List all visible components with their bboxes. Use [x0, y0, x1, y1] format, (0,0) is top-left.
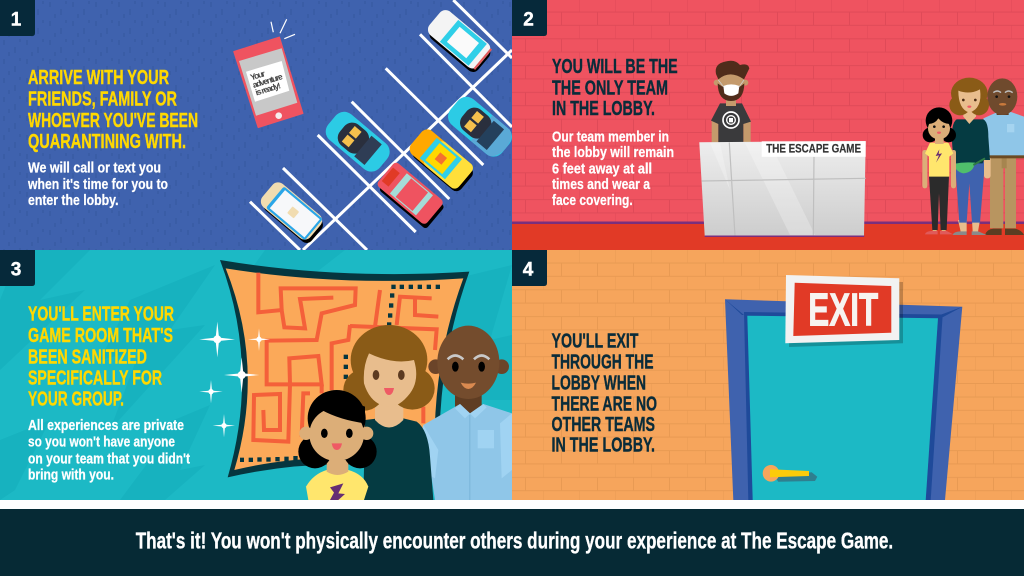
- icon: phone with message: is ready!: [254, 80, 282, 97]
- family standing in lobby: [922, 78, 1024, 235]
- heading: panel 3: BEEN SANITIZED: [28, 345, 147, 368]
- heading: panel 4: OTHER TEAMS: [552, 413, 655, 436]
- panel 1: arrive: [0, 0, 517, 250]
- badge: number 2: [512, 0, 547, 36]
- text: panel 3 body: bring with you.: [28, 466, 114, 483]
- text: panel 1 body: enter the lobby.: [28, 192, 118, 209]
- badge: number 1: 1: [11, 10, 22, 30]
- person: man: [414, 326, 512, 500]
- heading: panel 3: YOUR GROUP.: [28, 388, 124, 411]
- heading: panel 1: WHOEVER YOU'VE BEEN: [28, 109, 198, 132]
- heading: panel 3: GAME ROOM THAT'S: [28, 324, 173, 347]
- text: panel 2 body: the lobby will remain: [552, 144, 674, 161]
- heading: panel 1: ARRIVE WITH YOUR: [28, 66, 169, 89]
- heading: panel 4: THERE ARE NO: [552, 392, 657, 415]
- heading: panel 4: THROUGH THE: [552, 350, 654, 373]
- icon: phone with message: Your: [249, 68, 267, 82]
- text: panel 2 body: times and wear a: [552, 176, 651, 193]
- heading: panel 2: YOU WILL BE THE: [552, 55, 678, 78]
- badge: number 3: [0, 250, 35, 286]
- icon: sparkles: [199, 322, 270, 437]
- heading: panel 4: IN THE LOBBY.: [552, 433, 655, 456]
- footer banner: [0, 500, 1024, 576]
- family portrait: [298, 325, 512, 500]
- badge: number 2: 2: [523, 10, 534, 30]
- car: white van: [260, 182, 323, 243]
- text: panel 1 body: when it's time for you to: [27, 176, 168, 193]
- car: blue convertible left: [326, 112, 390, 172]
- staff member with mask: [711, 61, 751, 143]
- heading: panel 3: SPECIFICALLY FOR: [28, 367, 162, 390]
- heading: panel 1: [28, 66, 198, 153]
- icon: phone with message: adventure: [251, 71, 284, 90]
- lobby desk: [699, 141, 866, 237]
- text: panel 1 body: [27, 160, 168, 209]
- person: woman: [949, 78, 991, 235]
- badge: number 4: 4: [523, 260, 534, 280]
- text: panel 3 body: All experiences are private: [28, 417, 184, 434]
- icon: phone with message: [234, 19, 303, 127]
- person: girl: [298, 390, 377, 500]
- heading: panel 2: [552, 58, 678, 116]
- exit sign: EXIT: [808, 284, 878, 336]
- person: girl: [922, 107, 956, 234]
- heading: panel 4: [552, 329, 657, 456]
- person: woman: [343, 325, 435, 500]
- heading: panel 4: LOBBY WHEN: [552, 371, 646, 394]
- exit door: [725, 299, 962, 500]
- heading: panel 2: IN THE LOBBY.: [552, 97, 655, 120]
- panel 2: lobby: [512, 0, 1024, 250]
- map with maze: [220, 260, 469, 477]
- text: panel 2 body: face covering.: [552, 192, 633, 209]
- car: white and cyan top right: [428, 10, 492, 72]
- text: panel 1 body: We will call or text you: [28, 160, 161, 177]
- badge: number 4: [512, 250, 547, 286]
- car: yellow taxi: [410, 129, 473, 192]
- heading: panel 3: YOU'LL ENTER YOUR: [28, 303, 174, 326]
- text: panel 3 body: [28, 417, 190, 483]
- heading: panel 1: QUARANTINING WITH.: [28, 130, 186, 153]
- door handle: [763, 465, 817, 482]
- text: panel 3 body: so you won't have anyone: [28, 434, 175, 451]
- heading: panel 2: THE ONLY TEAM: [552, 76, 668, 100]
- badge: number 1: [0, 0, 35, 36]
- person: man: [983, 78, 1024, 235]
- text: panel 2 body: Our team member in: [552, 129, 669, 146]
- lobby desk: THE ESCAPE GAME: [766, 144, 861, 156]
- text: panel 3 body: on your team that you didn't: [28, 450, 190, 467]
- car: red: [378, 162, 444, 228]
- panel 3: game room: [0, 250, 512, 500]
- badge: number 3: 3: [11, 260, 21, 280]
- panel 4: exit: [512, 250, 1024, 500]
- parking lot lines: [250, 0, 512, 250]
- heading: panel 3: [28, 303, 174, 411]
- heading: panel 4: YOU'LL EXIT: [552, 329, 639, 352]
- text: panel 2 body: 6 feet away at all: [552, 160, 652, 178]
- car: blue convertible right: [448, 96, 512, 157]
- exit sign: [785, 275, 903, 347]
- heading: panel 1: FRIENDS, FAMILY OR: [28, 88, 177, 110]
- text: panel 2 body: [552, 129, 674, 209]
